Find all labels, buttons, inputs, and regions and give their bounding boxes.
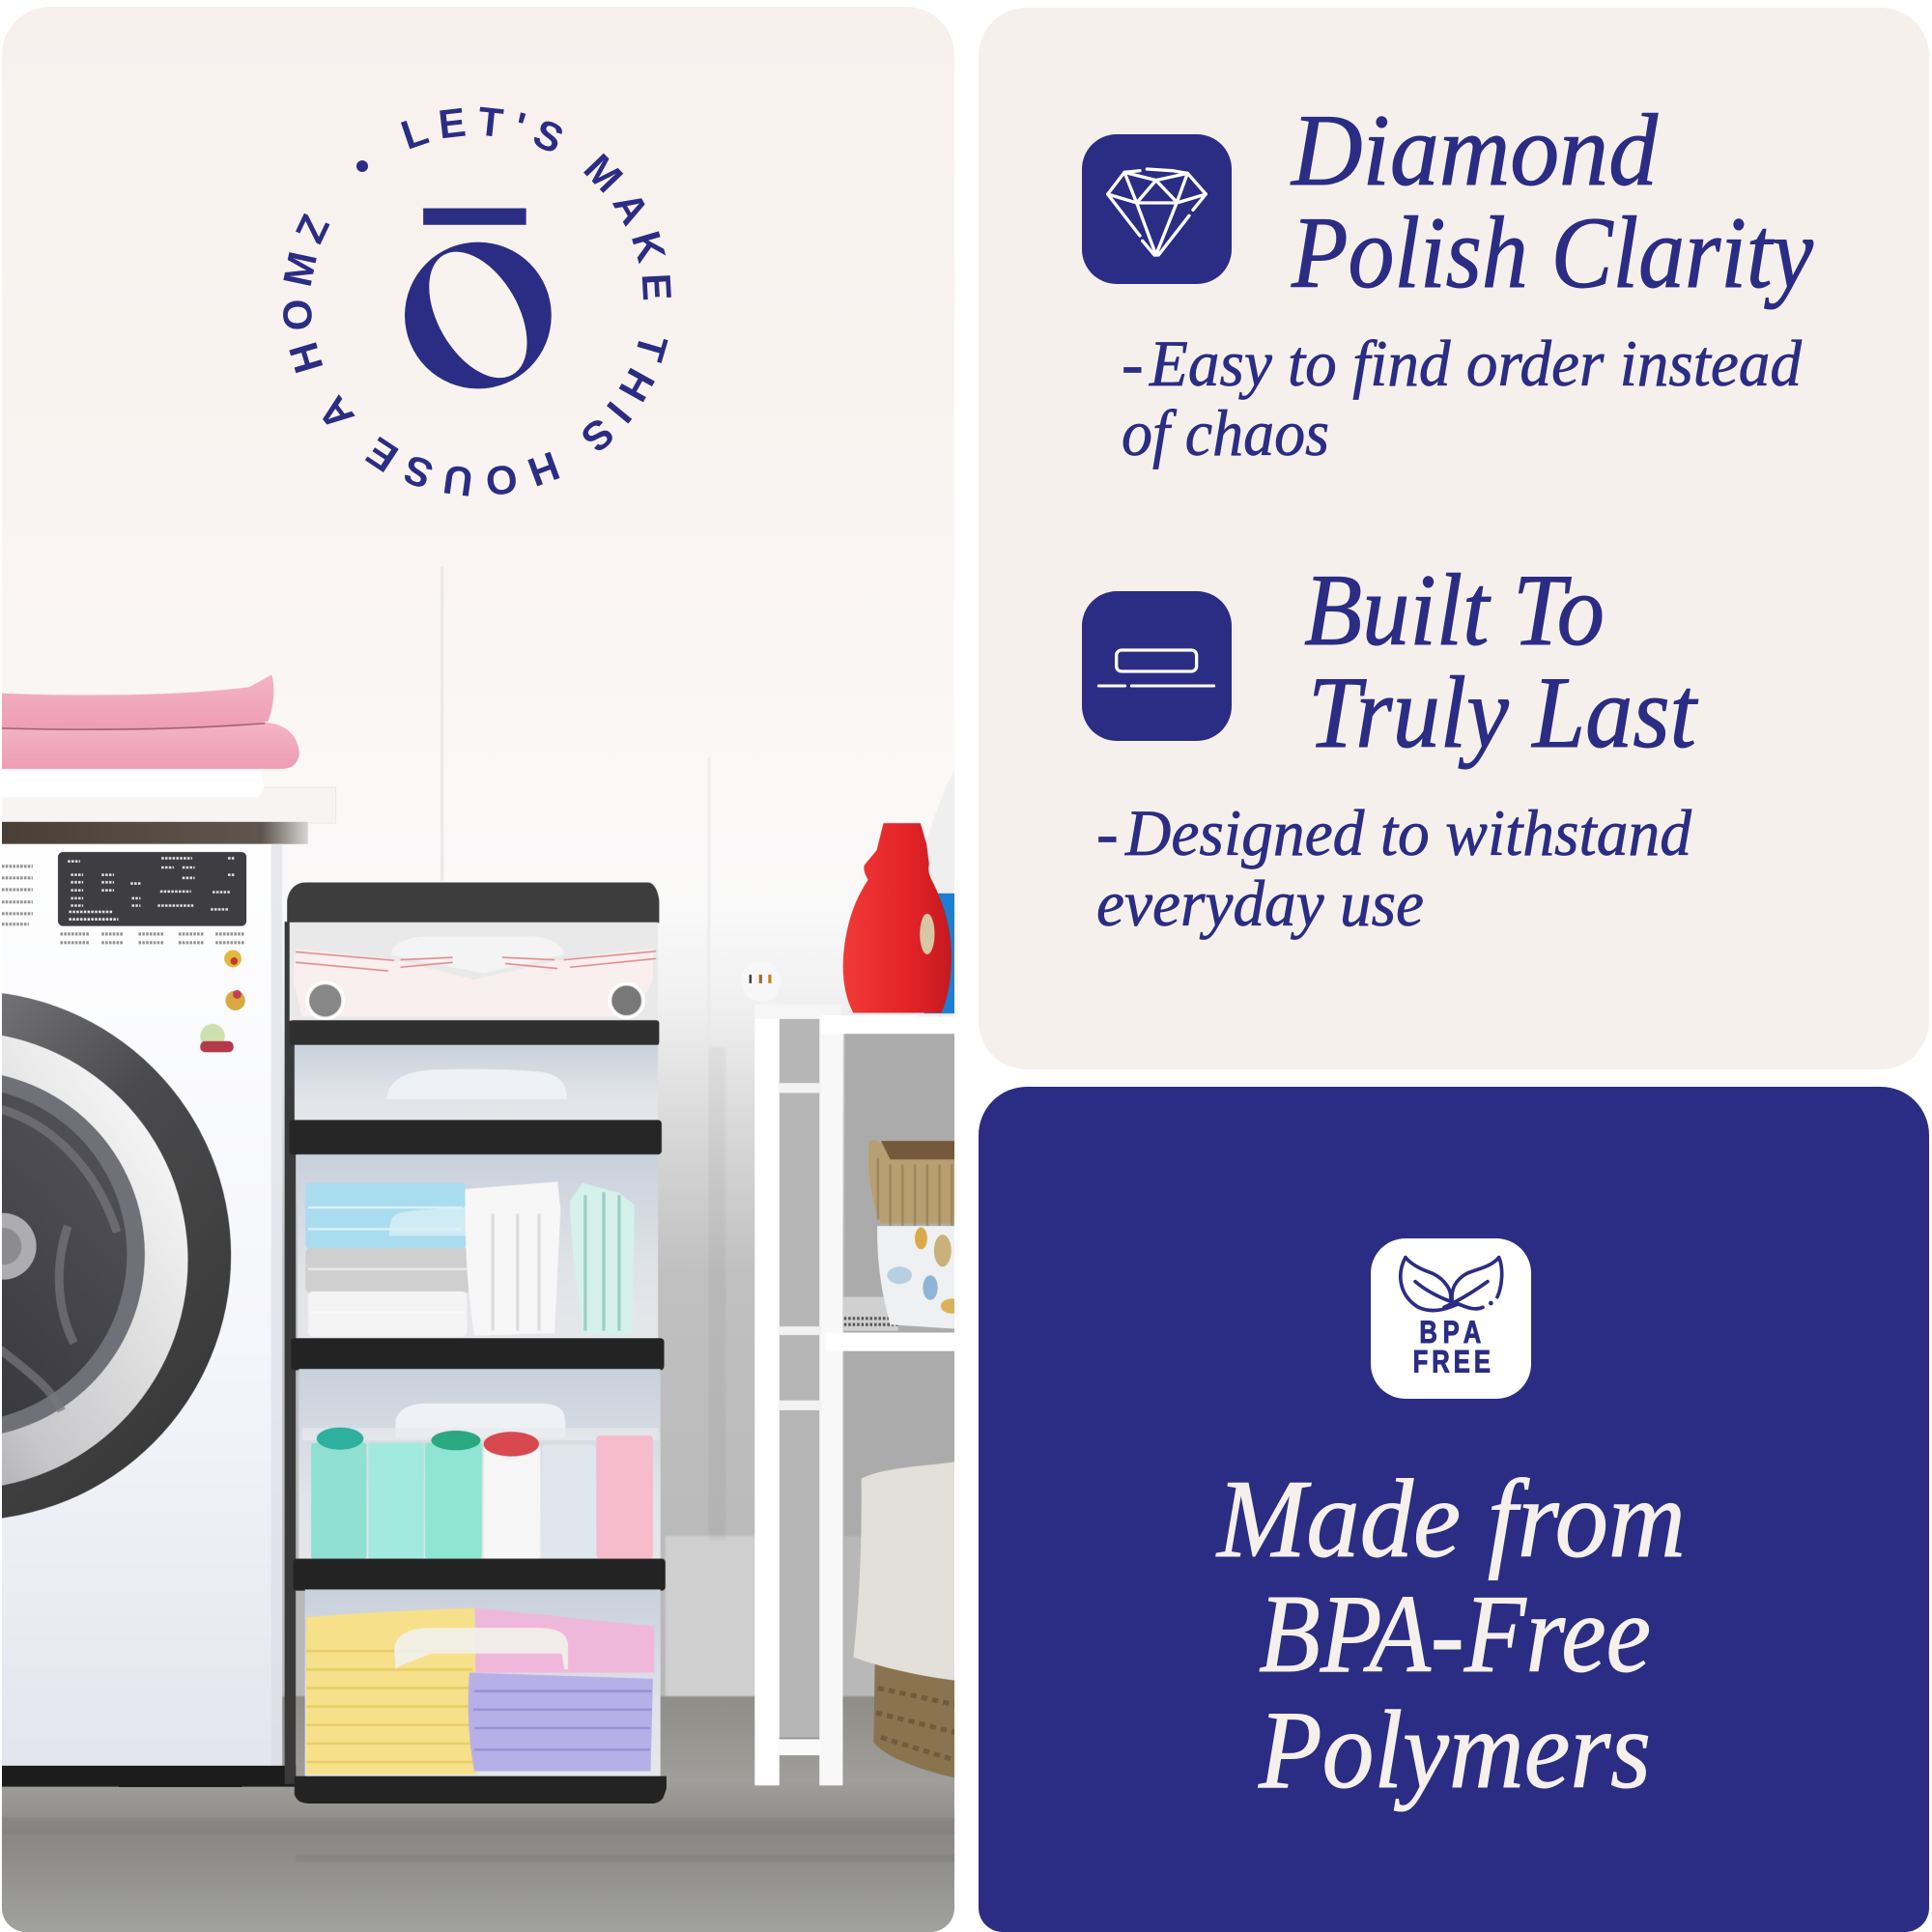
logo: Let's make this house a Homz	[283, 106, 671, 497]
heading: diamond polish clarity: Diamond	[1290, 94, 1659, 207]
icon: durable box	[1082, 591, 1232, 741]
icon: BPA free leaves: BPA	[1419, 1316, 1487, 1350]
text: easy to find order: -	[1122, 327, 1144, 400]
towels on washer	[0, 674, 336, 823]
storage basket	[868, 1140, 954, 1329]
heading: diamond polish clarity	[1290, 94, 1814, 309]
text: designed to withstand: -	[1096, 796, 1119, 869]
control panel	[58, 852, 246, 926]
drawer 5	[305, 1589, 661, 1777]
drawer 3	[298, 1154, 658, 1339]
red detergent bottle	[843, 770, 967, 1016]
heading: made from BPA-free polymers: Made from	[1215, 1458, 1686, 1581]
icon: knob on shelf	[741, 961, 781, 1002]
icon: BPA free leaves	[1371, 1238, 1531, 1399]
panel: BPA free	[979, 1087, 1929, 1932]
text: easy to find order	[1122, 327, 1803, 469]
drawer unit	[285, 882, 667, 1804]
heading: made from BPA-free polymers: Polymers	[1258, 1689, 1651, 1812]
text: designed to withstand	[1096, 796, 1692, 940]
laundry basket	[853, 1462, 954, 1777]
text: easy to find order: Easy to find order instead	[1149, 327, 1803, 400]
circular slogan: LET'S MAKE THIS HOUSE A HOMZ	[283, 106, 671, 497]
drawer 1	[290, 923, 658, 1021]
washer door	[0, 991, 231, 1520]
logo mark	[405, 209, 552, 394]
washing machine	[0, 822, 308, 1787]
text: easy to find order: of chaos	[1122, 396, 1329, 469]
panel: features	[979, 8, 1929, 1069]
heading: made from BPA-free polymers: BPA-Free	[1259, 1573, 1651, 1696]
icon: BPA free leaves: FREE	[1413, 1346, 1494, 1379]
heading: diamond polish clarity: Polish Clarity	[1291, 196, 1814, 309]
room background details	[0, 567, 967, 1932]
heading: made from BPA-free polymers	[1215, 1458, 1686, 1812]
drawer 4	[298, 1369, 661, 1560]
drawer 2	[295, 1045, 658, 1122]
magnets	[200, 950, 245, 1052]
white shelf	[754, 1005, 969, 1785]
heading: built to truly last	[1304, 554, 1698, 769]
top cap	[287, 882, 659, 923]
text: designed to withstand: everyday use	[1096, 867, 1424, 940]
heading: built to truly last: Built To	[1304, 554, 1605, 667]
text: designed to withstand: Designed to withstand	[1124, 796, 1692, 869]
panel: product photo	[0, 0, 969, 1932]
icon: diamond	[1082, 134, 1232, 284]
heading: built to truly last: Truly Last	[1308, 656, 1698, 769]
